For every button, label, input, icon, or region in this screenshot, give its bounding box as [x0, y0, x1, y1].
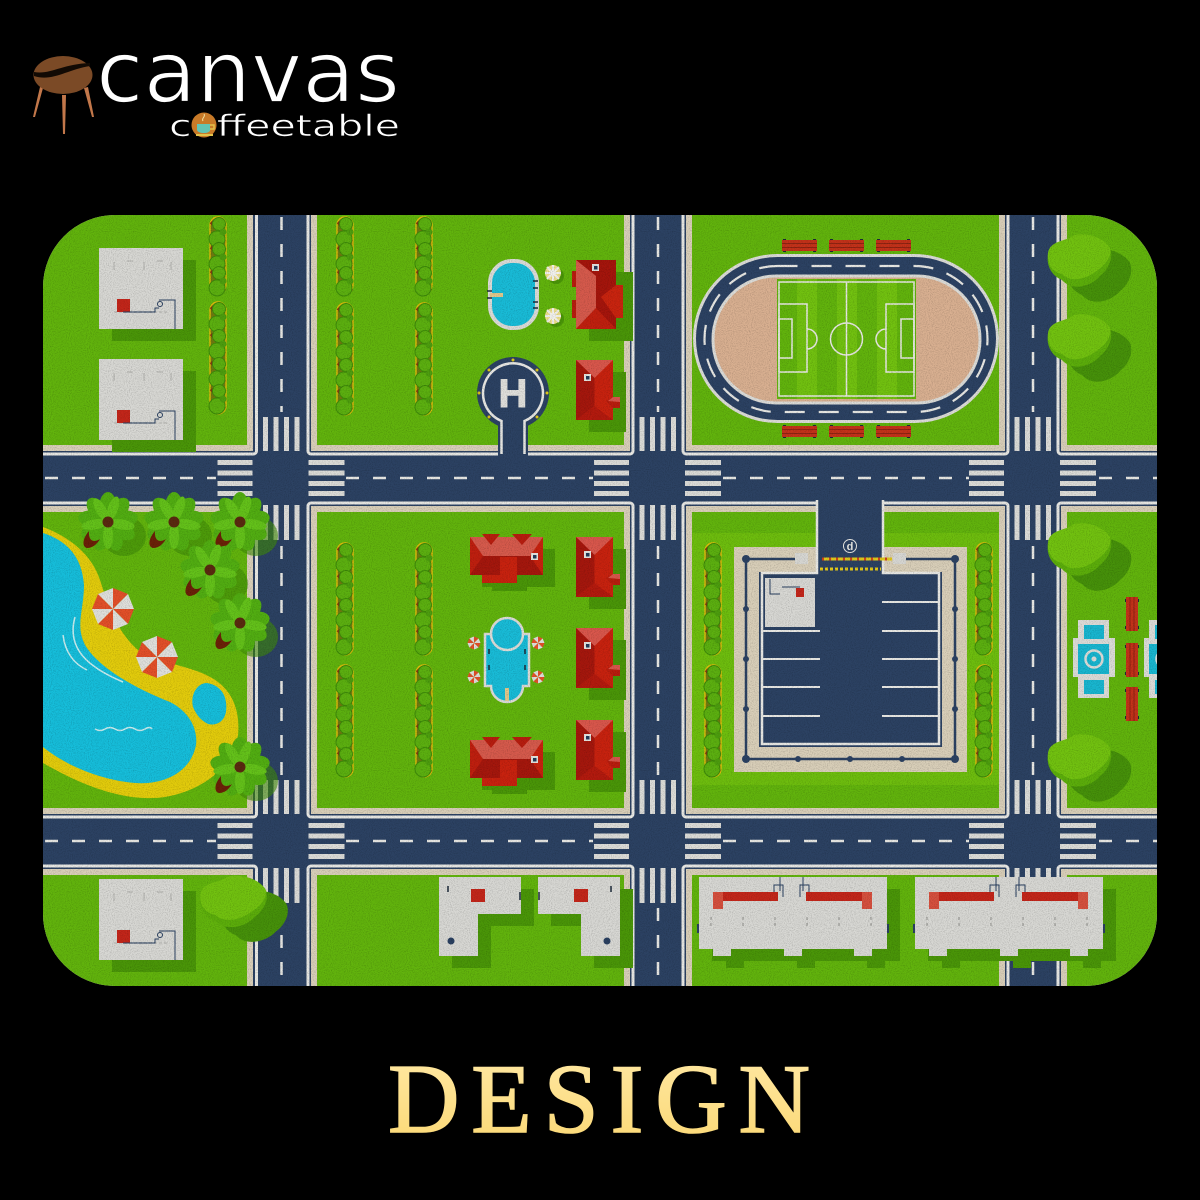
house: top block — [576, 360, 626, 432]
heading: DESIGN: DESIGN — [388, 1045, 810, 1154]
football pitch — [777, 279, 916, 399]
canvas texture — [43, 215, 1157, 986]
large house — [572, 260, 633, 341]
ornamental pool — [467, 618, 545, 702]
panel: stadium — [694, 239, 998, 438]
benches — [782, 239, 911, 438]
palm trees — [77, 492, 278, 801]
gate kiosk — [765, 578, 815, 627]
city blocks with pavement — [43, 215, 1157, 986]
parking bay lines — [763, 602, 938, 716]
trees: top right — [1048, 234, 1131, 382]
L-shaped buildings — [439, 877, 633, 968]
icon: coffee cup — [192, 112, 216, 138]
long apartment buildings — [698, 877, 1116, 968]
small pond — [192, 683, 226, 724]
trees: right middle — [1048, 523, 1131, 802]
road centre dashes — [45, 217, 1160, 990]
beach umbrellas — [545, 265, 564, 327]
panel: city map play mat — [43, 215, 1157, 986]
perimeter fence — [742, 555, 959, 763]
panel: lake park — [30, 492, 278, 801]
tree: bottom left — [200, 876, 288, 942]
icon: coffee bean table — [33, 56, 94, 134]
logo: canvas coffeetable — [33, 23, 400, 143]
parasols — [92, 588, 134, 630]
lake — [43, 533, 196, 784]
hedges: top row — [209, 217, 432, 415]
building: bottom left — [99, 879, 196, 972]
hedges — [704, 543, 992, 777]
hedges: middle block — [336, 543, 432, 777]
helipad — [477, 357, 549, 456]
sand beach — [30, 520, 238, 798]
parking sign — [844, 540, 856, 553]
parking lot surface — [759, 572, 942, 747]
oval pool — [487, 261, 538, 328]
logo word: canvas: canvas — [96, 23, 400, 123]
small parasols — [467, 636, 545, 684]
water ripples — [63, 617, 152, 730]
panel: car park — [692, 496, 999, 785]
parking sign: d — [847, 541, 853, 553]
panel: fountains and benches — [1073, 597, 1157, 721]
road surface — [43, 215, 1157, 986]
logo word: coffeetable: coffeetable — [169, 109, 400, 143]
houses: middle block — [470, 534, 626, 794]
helipad: H — [499, 372, 527, 416]
panel: top-left buildings — [99, 248, 196, 452]
barrier — [795, 553, 906, 569]
zebra crossings — [218, 417, 1096, 903]
lighter lawn — [692, 533, 999, 785]
running track — [694, 256, 998, 422]
concrete surround — [734, 547, 967, 772]
